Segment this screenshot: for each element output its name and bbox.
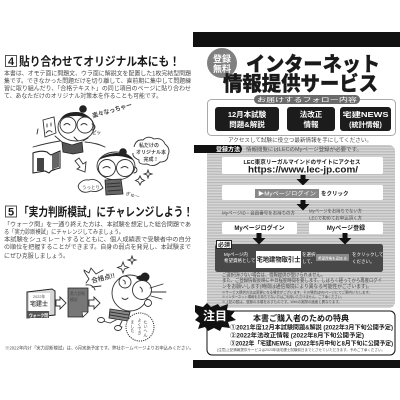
illustration: character cutting and pasting pages: 楽々なっちゃー: [91, 100, 133, 120]
starburst: attention: 注目: [203, 308, 227, 323]
illustration: character with finished book: うっとり: [82, 185, 100, 191]
label: required: [216, 240, 232, 249]
arrow: down left: [252, 233, 266, 244]
section 4 body text: [4, 70, 191, 100]
box: law revision: [287, 107, 335, 131]
illustration: mock exam booklet: 模試: [70, 297, 78, 302]
illustration: textbook Walk-mon: ウォーク問: [29, 312, 48, 319]
illustration: character cutting and pasting pages: ピッ: [92, 130, 101, 135]
box: my page registration: Myページ登録: [327, 224, 365, 232]
section 5 body text: の順位を把握することができます。自身の弱点を発見し、本試験まで: [4, 243, 191, 251]
panel: required step: 希望資格として: [224, 257, 255, 264]
panel: required step: して、: [302, 259, 315, 264]
arrow: down-right outlined: [75, 158, 86, 172]
box: site url: [222, 157, 383, 176]
box: news: (統計情報): [349, 120, 382, 129]
panel: purchaser benefits: ②2022年法改正情報 (2022年8月下旬公開予定): [230, 332, 364, 340]
branch labels: MyページID・会員番号をお持ちの方: [222, 210, 295, 216]
branch labels: LECで初めてお申込頂く方: [309, 214, 362, 222]
badge: free registration: 無料: [213, 63, 231, 74]
top black bar: [193, 32, 400, 47]
panel: registration method: [194, 145, 395, 308]
branch labels: Myページをお持ちでない方: [309, 208, 362, 214]
section 5 body text: る「実力診断模試」にチャレンジしてみましょう。: [4, 228, 124, 236]
section 5 body text: [4, 220, 191, 260]
section 4 heading: 4: [8, 56, 15, 68]
illustration: character with finished book: ぎゅー: [125, 190, 141, 201]
illustration: textbook Walk-mon: [27, 289, 55, 319]
box: December exam: 12月本試験: [228, 109, 267, 119]
registration note: 情報閲覧にはLECのMyページ登録が必要です。: [246, 146, 362, 153]
fine print: ※インターネット環境をお持ちでない方はご利用いただけません。ご了承ください。: [222, 294, 344, 299]
title: 情報提供サービス: [223, 72, 378, 96]
box: law revision: 法改正: [300, 109, 323, 119]
panel: required step: を選択: [302, 251, 316, 258]
section 4 body text: 習に取り組んだり、「合格テキスト」の同じ項目のページに貼り合わせ: [4, 84, 191, 92]
access text: アクセスして試験に役立つ最新情報を手にしてください。: [228, 136, 372, 144]
starburst: attention: [195, 303, 236, 331]
section 5 body text: 本試験をシュミレートするとともに、個人成績表で受験者中の自分: [4, 236, 191, 244]
box: my page registration: [309, 222, 383, 234]
badge: free registration: 登録: [213, 53, 231, 64]
illustration: open book: [33, 151, 60, 173]
callout: speech bubble: 完成！: [143, 156, 159, 163]
box: news: [340, 107, 391, 131]
tab: registration label: [194, 145, 242, 154]
box: news: 宅建NEWS: [342, 110, 389, 119]
fine print: ※サービス提供方法は変更になる場合がございます。その場合はMyページにてご案内いたします。: [222, 289, 372, 294]
box: login click: ▶Myページログイン: [258, 190, 317, 198]
illustration: textbook Walk-mon: 2022年: [33, 294, 45, 299]
arrow: to mock exam: [56, 297, 66, 309]
pill: follow-up heading: お届けするフォロー内容: [257, 96, 357, 104]
notes: ご選択頂けない場合は、情報提供が受けられません。: [222, 272, 325, 278]
stamp: well done: たいへん: [144, 320, 148, 337]
box: my page login: [222, 222, 297, 234]
notes: また、ご登録情報反映に半日程度時間を要します。しばらく経ってから再度ログイ: [222, 277, 382, 284]
notes: ンをお願いします(時間は通信環境により異なる可能性がございます)。: [222, 283, 372, 290]
callout: speech bubble: [133, 137, 169, 166]
section 5 body text: にぜひ克服しましょう。: [4, 252, 69, 260]
panel: purchaser benefits: [207, 311, 395, 355]
section 4 body text: て、あなただけのオリジナル対策本を作ることも可能です。: [4, 92, 162, 100]
bottom black bar: [193, 360, 400, 368]
box: December exam: [215, 107, 279, 131]
box: login click: [222, 185, 383, 200]
arrow: down 1: [296, 175, 310, 186]
arrow: down 2: [296, 200, 310, 210]
callout: jagged exclamation: [84, 268, 116, 290]
branch labels: [222, 208, 362, 222]
title: [223, 53, 380, 96]
section 5 body text: 「ウォーク問」を一通り終えた方は、本試験を想定した総合問題であ: [4, 220, 191, 228]
box: site url: LEC東京リーガルマインドのサイトにアクセス: [244, 158, 361, 166]
section 4 body text: 集です。できなかった問題だけを切り離して、直前期に集中して問題練: [4, 77, 191, 85]
title: インターネット: [246, 53, 380, 76]
tab: registration label: 登録方法: [216, 146, 240, 154]
panel: purchaser benefits: ③2022年「宅建NEWS」(2022年5月中旬と8月下旬に公開予定): [230, 340, 393, 348]
illustration: character cutting and pasting pages: [33, 100, 133, 154]
panel: purchaser benefits: ①2021年度12月本試験問題&解説 (2022年3月下旬公開予定): [230, 324, 393, 332]
illustration: mock exam booklet: [68, 288, 88, 317]
panel: purchaser benefits: 本書ご購入者のための特典: [253, 313, 349, 323]
panel: required step: 宅地建物取引士: [256, 254, 301, 264]
stamp: well done: [126, 313, 154, 341]
fine print: ※上記の図は、登録の手順を示すものです。Webの実際の画面と異なります。: [222, 299, 342, 304]
illustration: surprised character: [98, 272, 166, 330]
stamp: well done: よくでき: [138, 318, 142, 335]
notes: [222, 272, 382, 290]
arrow: to character: [89, 297, 100, 309]
panel: required step: Myページ内: [224, 251, 248, 258]
box: login click: をクリック: [321, 190, 349, 198]
panel: required step: [215, 240, 383, 272]
box: law revision: 情報: [304, 119, 319, 129]
icon: sparkles: [136, 170, 152, 185]
callout: speech bubble: 私だけの: [139, 142, 159, 149]
illustration: textbook Walk-mon: 宅建士: [30, 300, 48, 308]
panel: required step: 希望資格を追加 ⊕: [318, 255, 347, 260]
icon: sparkles over character: [118, 256, 136, 273]
section 5 heading: 5: [8, 206, 14, 218]
footnote: ※2022年向け「実力診断模試」は、6月実施予定です。弊社ホームページよりお申込みください。: [5, 344, 194, 352]
section 4 heading: 貼り合わせてオリジナル本にも！: [19, 54, 180, 68]
panel: purchaser benefits: (注意)上記情報提供サービスは2023年版宅建士試験前日までとさせていただきます。予めご了承ください。: [217, 347, 385, 352]
label: required: 必須: [218, 241, 230, 249]
box: December exam: 問題&解説: [229, 119, 265, 129]
callout: speech bubble: オリジナル本: [136, 149, 166, 156]
fine print: [222, 289, 372, 304]
stamp: well done: ました: [130, 320, 136, 334]
arrow: down right: [338, 233, 352, 244]
section 5 heading: 「実力判断模試」にチャレンジしよう！: [19, 204, 193, 219]
box: my page login: Myページログイン: [234, 224, 285, 232]
panel: required step: ください。: [352, 258, 374, 265]
pill: follow-up heading: [254, 95, 360, 104]
section 4 body text: 本書は、オモテ面に問題文、ウラ面に解説文を配置した1枚完結型問題: [4, 70, 191, 78]
panel: required step: をクリックして: [352, 251, 383, 258]
panel: follow-up contents: [208, 95, 396, 136]
illustration: mock exam booklet: 実力診断: [70, 291, 85, 296]
illustration: character with finished book: [78, 148, 141, 201]
box: site url: https://www.lec-jp.com/: [248, 164, 358, 176]
callout: jagged exclamation: 合格点!!: [90, 270, 116, 285]
badge: free registration: [207, 48, 237, 78]
